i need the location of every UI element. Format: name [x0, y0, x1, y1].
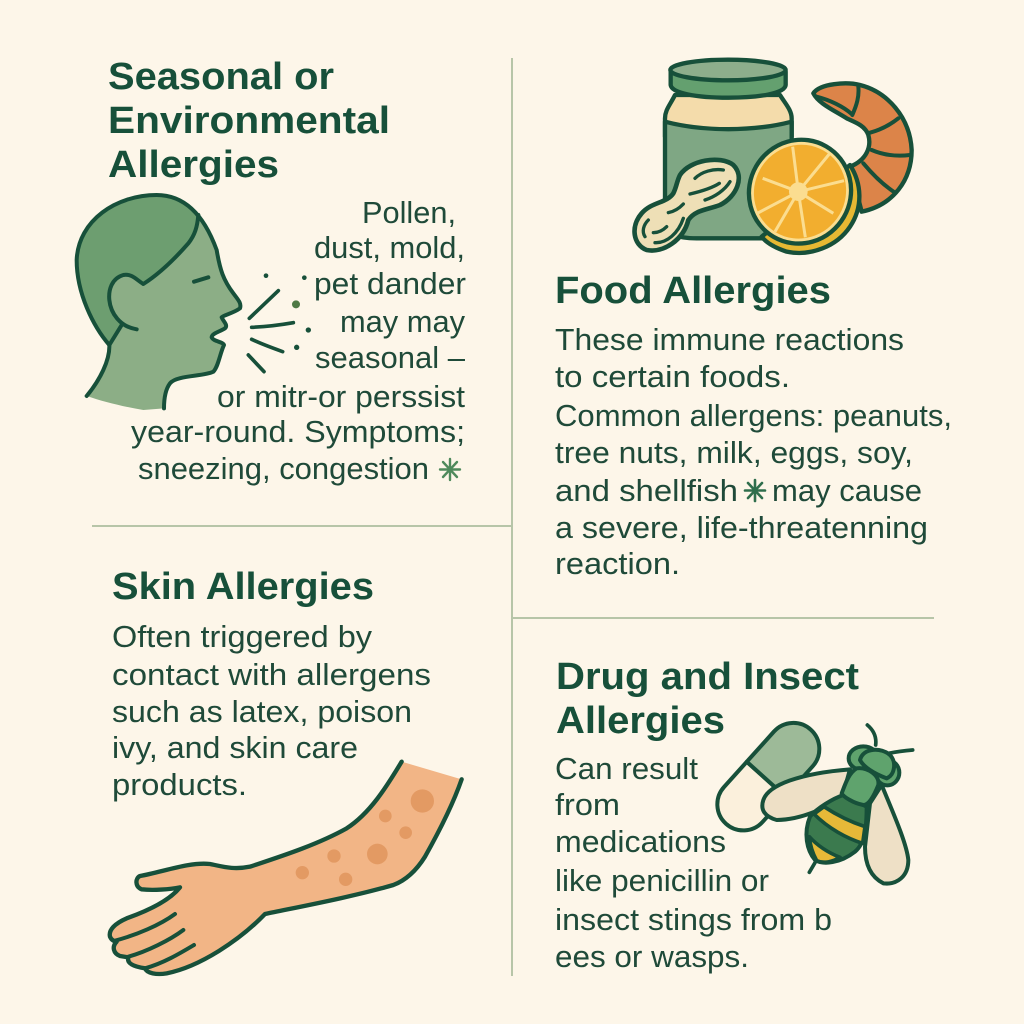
text block: food description: may cause — [772, 473, 922, 508]
text block: seasonal description: or mitr-or perssist — [217, 379, 465, 414]
text block: seasonal description: dust, mold, — [314, 230, 465, 265]
heading: seasonal: Allergies — [108, 144, 279, 186]
text block: skin description — [112, 619, 431, 802]
text block: food description — [555, 322, 952, 581]
peanut — [635, 160, 739, 251]
text block: seasonal description — [131, 195, 466, 486]
icon: capsule and bee — [707, 712, 913, 884]
heading: drug and insect: Allergies — [556, 700, 725, 742]
text block: seasonal description: Pollen, — [362, 195, 456, 230]
text block: skin description: ivy, and skin care — [112, 730, 358, 765]
icon: sneezing head — [77, 195, 311, 410]
text block: drug description — [555, 751, 832, 974]
heading: drug and insect — [556, 656, 859, 742]
heading: drug and insect: Drug and Insect — [556, 656, 859, 698]
heading: seasonal — [108, 56, 390, 186]
text block: skin description: contact with allergens — [112, 657, 431, 692]
text block: seasonal description: seasonal – — [315, 340, 466, 375]
panel: skin allergies — [110, 566, 462, 974]
text block: skin description: such as latex, poison — [112, 694, 412, 729]
text block: food description: to certain foods. — [555, 359, 790, 394]
icon: food allergens — [635, 60, 912, 262]
text block: drug description: Can result — [555, 751, 698, 786]
text block: drug description: ees or wasps. — [555, 939, 749, 974]
text block: seasonal description: pet dander — [314, 266, 466, 301]
panel: drug and insect allergies — [555, 656, 913, 974]
text block: seasonal description: year-round. Symptoms; — [131, 414, 465, 449]
text block: drug description: from — [555, 787, 620, 822]
text block: food description: tree nuts, milk, eggs, soy, — [555, 435, 913, 470]
icon: arm with rash — [110, 762, 462, 974]
text block: food description: Common allergens: peanuts, — [555, 398, 952, 433]
text block: food description: a severe, life-threatenning — [555, 510, 928, 545]
text block: skin description: products. — [112, 767, 247, 802]
capsule — [707, 712, 830, 841]
panel: seasonal or environmental allergies — [77, 56, 466, 486]
heading: skin allergies: Skin Allergies — [112, 566, 374, 608]
text block: seasonal description: sneezing, congestion — [138, 451, 429, 486]
text block: drug description: medications — [555, 824, 726, 859]
heading: seasonal: Environmental — [108, 100, 390, 142]
heading: food allergies: Food Allergies — [555, 270, 831, 312]
bee — [762, 725, 913, 884]
shrimp — [813, 83, 912, 212]
panel: food allergies — [555, 60, 952, 581]
heading: seasonal: Seasonal or — [108, 56, 334, 98]
icon: asterisk — [745, 480, 765, 501]
text block: food description: These immune reactions — [555, 322, 904, 357]
text block: drug description: like penicillin or — [555, 863, 769, 898]
text block: seasonal description: may may — [340, 304, 465, 339]
text block: food description: and shellfish — [555, 473, 738, 508]
text block: drug description: insect stings from b — [555, 902, 832, 937]
text block: food description: reaction. — [555, 546, 680, 581]
jar — [665, 60, 792, 238]
icon: asterisk — [440, 459, 460, 480]
lemon — [730, 121, 870, 262]
text block: skin description: Often triggered by — [112, 619, 373, 654]
